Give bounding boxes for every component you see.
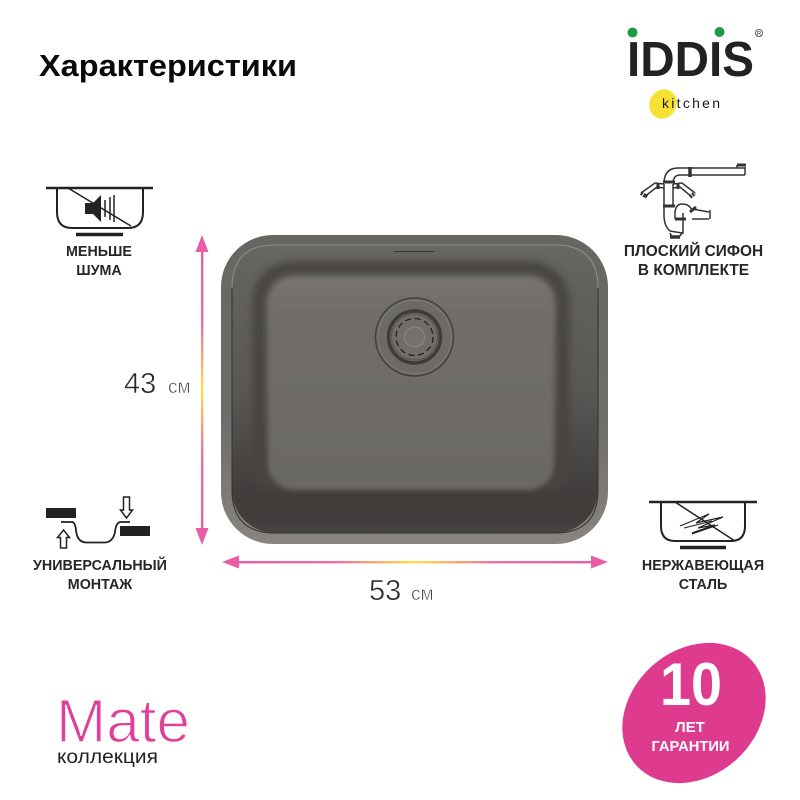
arrow: height <box>196 235 208 545</box>
title: Характеристики <box>39 48 297 83</box>
icon: siphon <box>641 165 746 237</box>
dimension: 43 cm: 43 <box>124 368 156 400</box>
icon: less noise <box>46 188 153 234</box>
icon: stainless steel <box>649 502 757 548</box>
label: less noise: ШУМА <box>76 263 122 279</box>
drain <box>376 298 454 376</box>
dimension: 53 cm: см <box>411 584 434 605</box>
warranty badge: ЛЕТ <box>675 719 705 736</box>
icon: universal mounting <box>46 497 150 548</box>
sink <box>221 235 608 544</box>
arrow: width <box>222 556 608 568</box>
logo: IDDIS kitchen: R <box>757 32 762 38</box>
logo: IDDIS kitchen: kitchen <box>662 95 720 111</box>
collection label: коллекция <box>57 747 158 768</box>
label: siphon: В КОМПЛЕКТЕ <box>638 262 749 279</box>
label: stainless steel: СТАЛЬ <box>679 577 727 593</box>
warranty badge <box>594 614 794 800</box>
warranty badge: ГАРАНТИИ <box>652 738 730 755</box>
sink overflow slot <box>394 250 434 252</box>
dimension: 43 cm: см <box>168 377 191 398</box>
dimension: 53 cm: 53 <box>369 575 401 607</box>
label: siphon: ПЛОСКИЙ СИФОН <box>624 242 763 260</box>
logo: IDDIS kitchen: IDDIS <box>627 33 754 87</box>
label: stainless steel: НЕРЖАВЕЮЩАЯ <box>642 558 764 574</box>
label: less noise: МЕНЬШЕ <box>66 244 132 260</box>
label: universal mounting: МОНТАЖ <box>68 577 132 593</box>
warranty badge: 10 <box>660 651 722 718</box>
collection name: Mate <box>56 687 190 755</box>
label: universal mounting: УНИВЕРСАЛЬНЫЙ <box>33 556 167 574</box>
logo: IDDIS kitchen <box>627 27 763 123</box>
